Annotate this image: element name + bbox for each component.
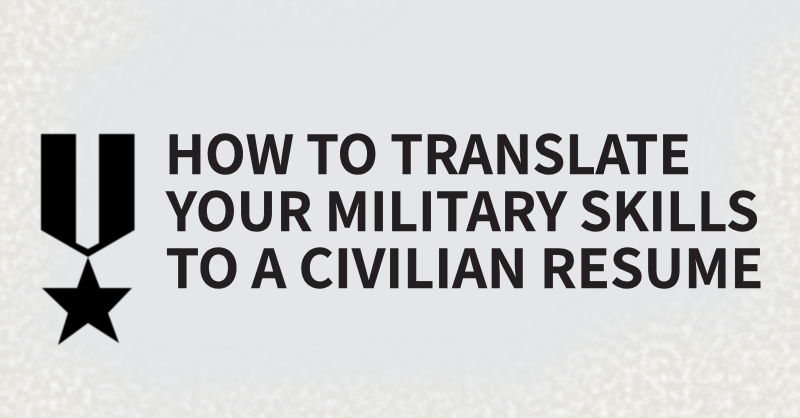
title line 1: HOW TO TRANSLATE <box>165 113 691 190</box>
medal ribbon <box>41 134 134 257</box>
medal star <box>42 257 132 345</box>
title <box>165 113 764 304</box>
title line 2: YOUR MILITARY SKILLS <box>165 170 759 247</box>
title line 3: TO A CIVILIAN RESUME <box>166 227 764 304</box>
icon: military medal <box>41 134 134 345</box>
